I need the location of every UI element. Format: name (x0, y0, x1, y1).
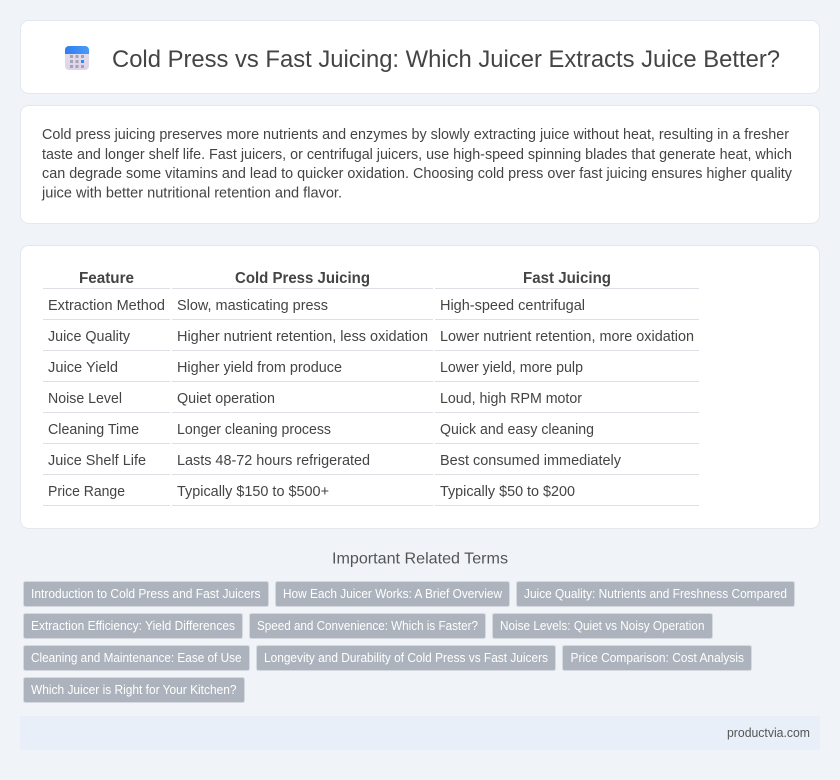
row: extraction method: Extraction Method (48, 298, 165, 314)
title: Cold Press vs Fast Juicing: Which Juicer Extracts Juice Better? (112, 46, 780, 73)
text block: intro: juice with better nutritional retention and flavor. (41, 186, 342, 202)
tag (562, 646, 752, 670)
tag (276, 582, 510, 606)
table header row: Feature (79, 270, 134, 287)
row: cleaning time: Cleaning Time (48, 422, 139, 438)
table header row: Cold Press Juicing (235, 270, 370, 287)
row: extraction method: High-speed centrifugal (440, 298, 585, 314)
row: price range: Typically $150 to $500+ (177, 484, 329, 500)
row: noise level: Loud, high RPM motor (440, 391, 582, 407)
panel: title header (20, 20, 820, 94)
tag: Price Comparison: Cost Analysis (570, 651, 744, 665)
tag (24, 646, 250, 670)
row: cleaning time: Longer cleaning process (177, 422, 331, 438)
row: price range: Price Range (48, 484, 125, 500)
tag: How Each Juicer Works: A Brief Overview (283, 587, 503, 601)
tag: Cleaning and Maintenance: Ease of Use (31, 651, 242, 665)
row: noise level (48, 391, 582, 407)
row: cleaning time: Quick and easy cleaning (440, 422, 594, 438)
tag list: related terms (24, 582, 794, 702)
row: juice shelf life (48, 453, 622, 469)
panel: intro paragraph (20, 106, 820, 224)
row: noise level: Noise Level (48, 391, 122, 407)
text block: intro: taste and longer shelf life. Fast juicers, or centrifugal juicers, use high-speed spinning blades that generate heat, which (42, 147, 792, 163)
row: juice yield: Juice Yield (48, 360, 118, 376)
tag: Which Juicer is Right for Your Kitchen? (31, 683, 237, 697)
tag (24, 678, 244, 702)
table rules (43, 288, 699, 506)
tag (492, 614, 712, 638)
row: extraction method: Slow, masticating press (177, 298, 328, 314)
tag: Juice Quality: Nutrients and Freshness Compared (524, 587, 787, 601)
row: juice shelf life: Best consumed immediately (440, 453, 622, 469)
row: price range: Typically $50 to $200 (440, 484, 575, 500)
tag (24, 582, 268, 606)
tag (250, 614, 486, 638)
text block: intro (41, 127, 793, 202)
panel: comparison table (20, 246, 820, 528)
row: juice yield: Higher yield from produce (177, 360, 342, 376)
tag: Introduction to Cold Press and Fast Juicers (31, 587, 260, 601)
tag (516, 582, 794, 606)
row: juice yield (48, 360, 583, 376)
tag: Noise Levels: Quiet vs Noisy Operation (500, 619, 705, 633)
tag (256, 646, 556, 670)
table header row: Fast Juicing (523, 270, 611, 287)
row: juice quality: Higher nutrient retention, less oxidation (177, 329, 428, 345)
row: juice quality: Juice Quality (48, 329, 131, 345)
row: juice quality: Lower nutrient retention, more oxidation (440, 329, 694, 345)
heading: related terms: Important Related Terms (332, 550, 508, 568)
text block: intro: can degrade some vitamins and lead to quicker oxidation. Choosing cold press over fast juicing ensures higher quality (42, 166, 793, 182)
row: cleaning time (48, 422, 594, 438)
tag: Extraction Efficiency: Yield Differences (31, 619, 235, 633)
icon: calendar (65, 46, 89, 70)
tag: Longevity and Durability of Cold Press vs Fast Juicers (264, 651, 548, 665)
row: noise level: Quiet operation (177, 391, 275, 407)
row: price range (48, 484, 575, 500)
row: juice yield: Lower yield, more pulp (440, 360, 583, 376)
row: extraction method (48, 298, 585, 314)
footer (20, 716, 820, 750)
row: juice shelf life: Juice Shelf Life (48, 453, 146, 469)
footer: productvia.com (727, 726, 810, 740)
table header row (79, 270, 611, 287)
row: juice quality (48, 329, 694, 345)
row: juice shelf life: Lasts 48-72 hours refrigerated (177, 453, 370, 469)
tag (24, 614, 242, 638)
tag: Speed and Convenience: Which is Faster? (257, 619, 478, 633)
text block: intro: Cold press juicing preserves more nutrients and enzymes by slowly extracting juice without heat, resulting in a fresher (42, 127, 789, 143)
